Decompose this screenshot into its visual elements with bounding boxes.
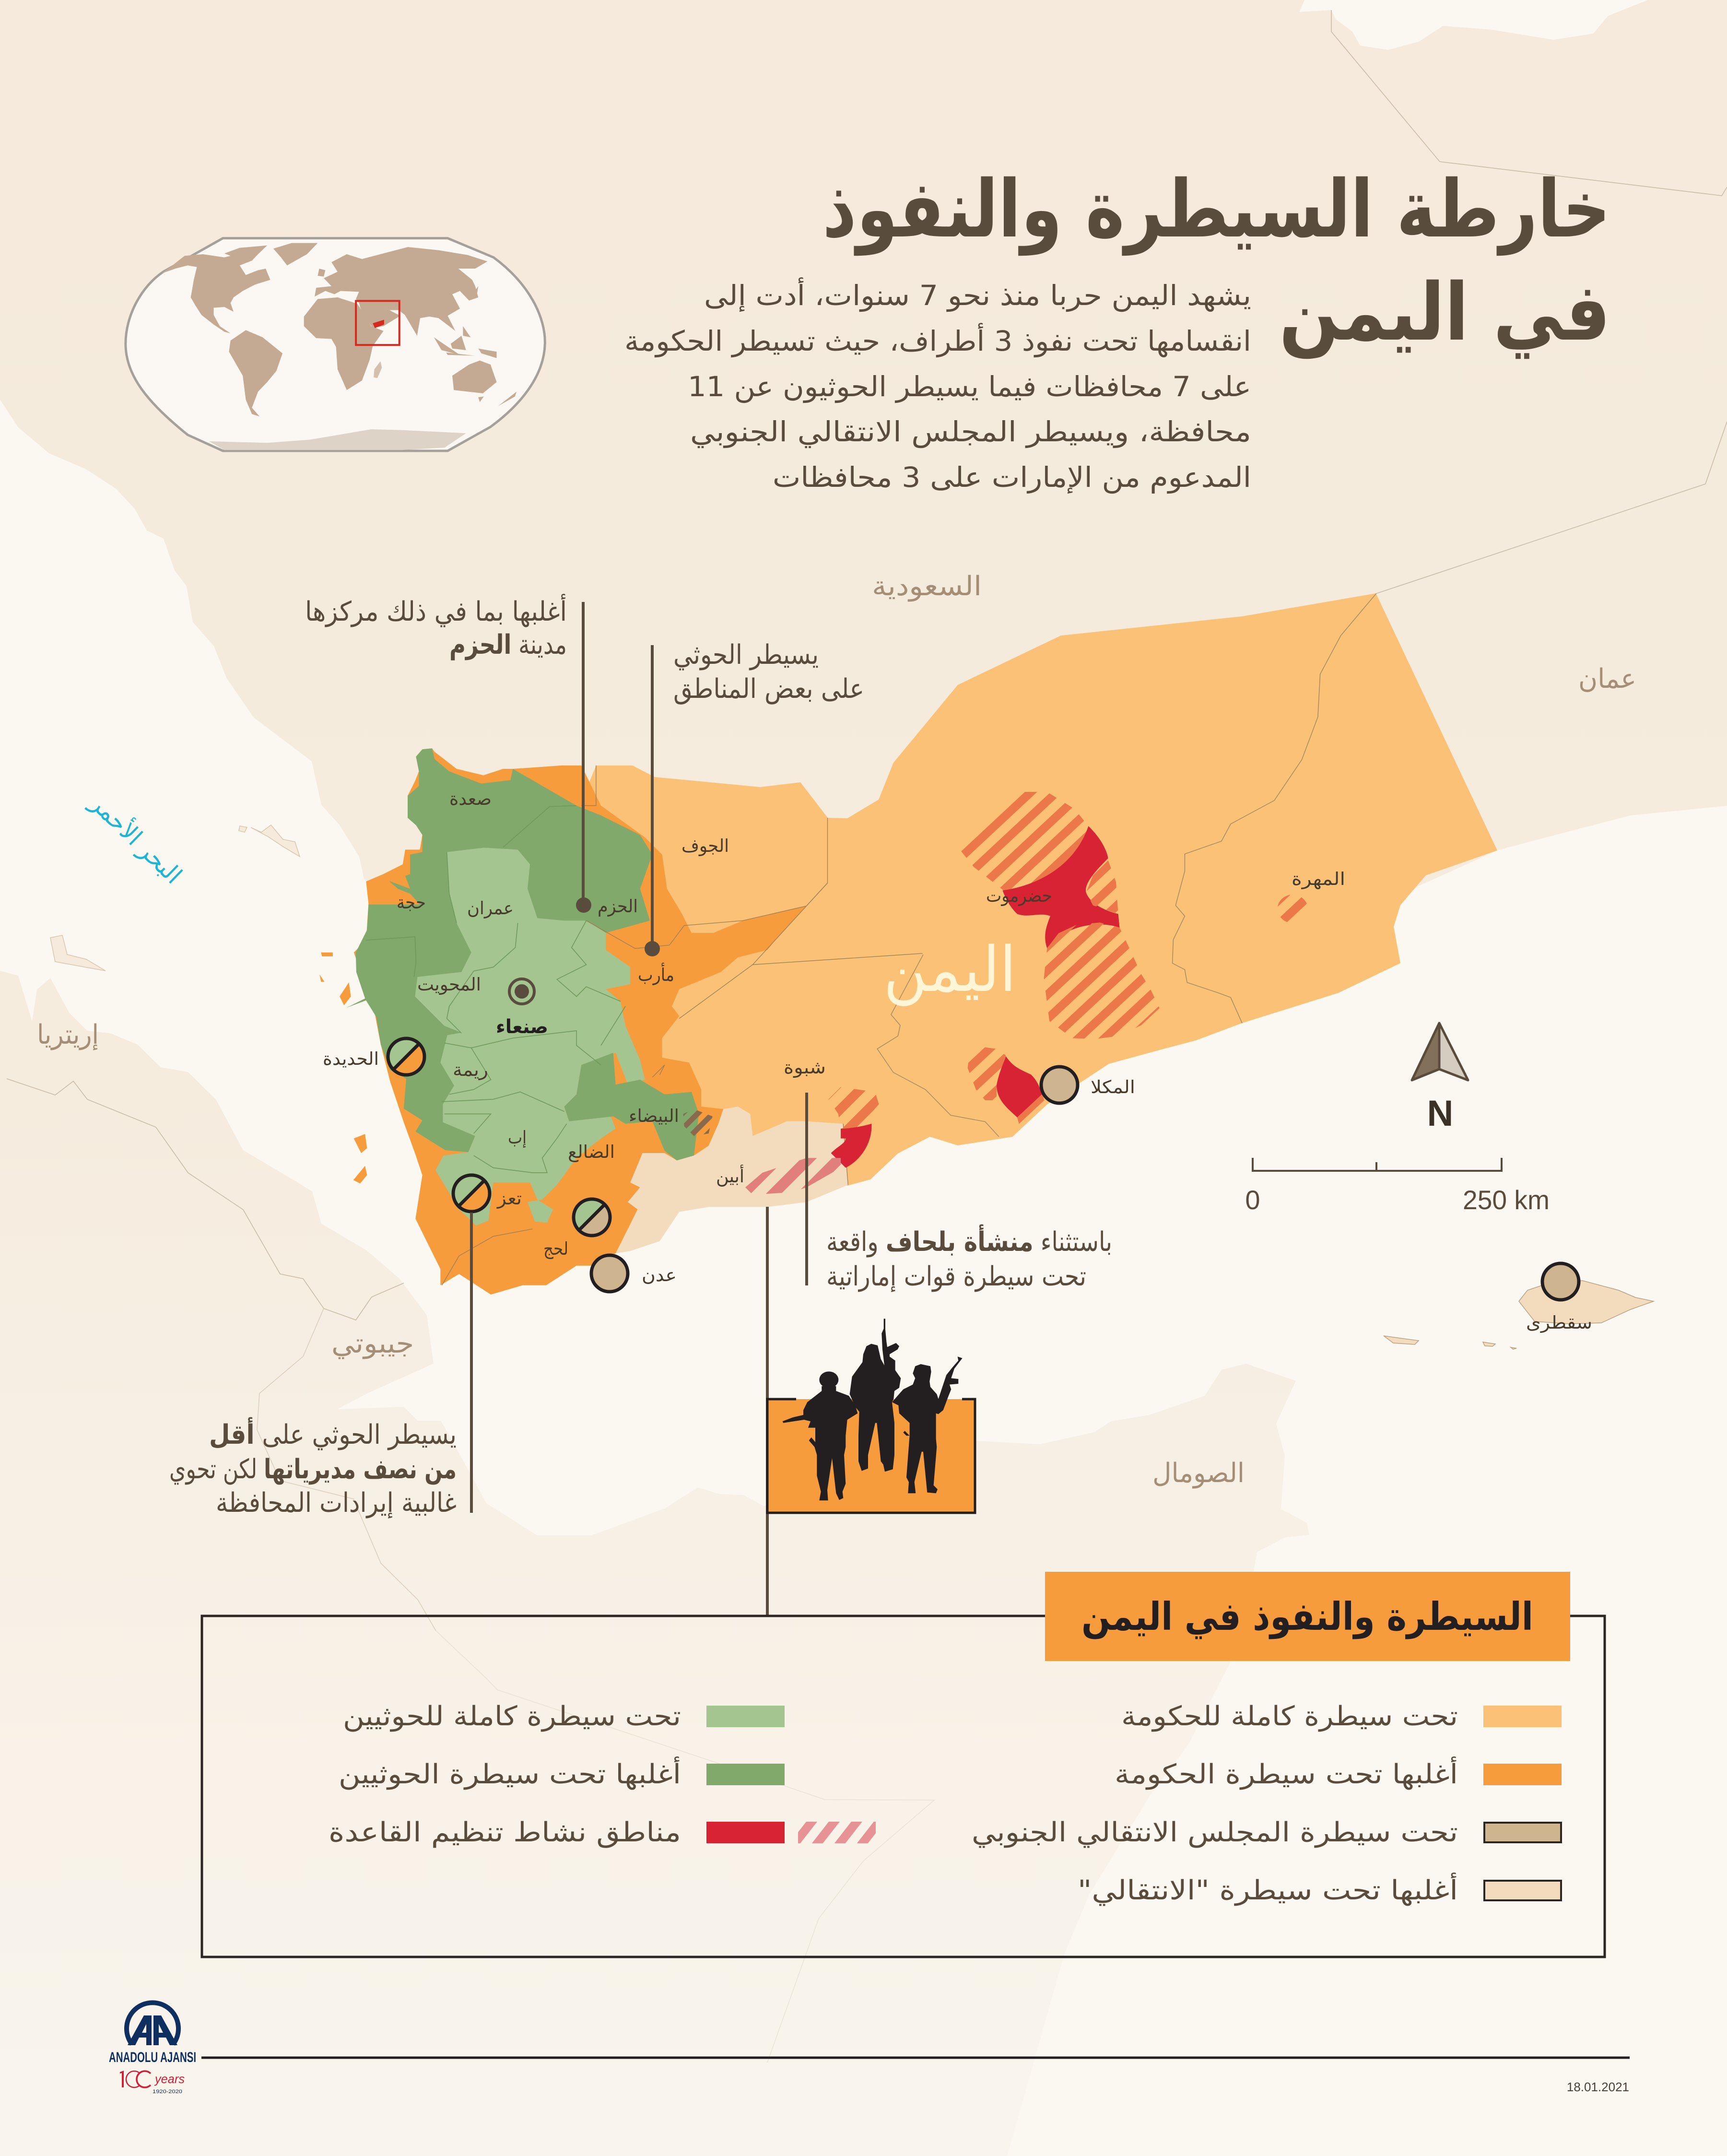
callout: Taiz: من نصف مديرياتها لكن تحوي: [169, 1454, 457, 1485]
soldiers panel: [767, 1319, 975, 1513]
intro paragraph: [624, 277, 1251, 494]
callout: Taiz: يسيطر الحوثي على أقل: [209, 1417, 457, 1450]
province labels: أبين: [716, 1165, 744, 1187]
province boundaries: [366, 806, 625, 1173]
region: mostly government: [354, 748, 807, 1295]
scale bar: [1245, 1158, 1550, 1215]
province labels: صعدة: [449, 789, 492, 809]
eastern province boundaries: [877, 594, 1376, 1137]
continents: [162, 243, 517, 416]
sea label: Red Sea: البحر الأحمر: [84, 788, 188, 889]
legend: mostly government: أغلبها تحت سيطرة الحكومة: [1115, 1756, 1458, 1790]
date: 18.01.2021: [1567, 2080, 1629, 2094]
province labels: المحويت: [417, 974, 481, 995]
callout: Marib: على بعض المناطق: [673, 673, 864, 705]
gulf sea patch: [1299, 0, 1648, 50]
globe frame: [126, 238, 545, 451]
callout: Taiz: [169, 1213, 471, 1519]
province labels: الحديدة: [323, 1049, 379, 1069]
red: Hadramawt: [1002, 826, 1119, 948]
map of Yemen: [319, 593, 1497, 1295]
scale bar: 250 km: [1463, 1185, 1550, 1215]
province labels: المكلا: [1091, 1077, 1135, 1097]
scale bar: 0: [1245, 1185, 1260, 1215]
legend: full government: تحت سيطرة كاملة للحكومة: [1121, 1701, 1458, 1732]
legend: mostly STC: أغلبها تحت سيطرة "الانتقالي": [1078, 1873, 1458, 1906]
hatch: Abyan AQAP: [745, 1158, 841, 1195]
province labels: شبوة: [784, 1057, 826, 1078]
red: Mukalla: [997, 1056, 1043, 1118]
province labels: المهرة: [1292, 869, 1345, 889]
province labels: سقطرى: [1526, 1312, 1592, 1333]
intro paragraph: انقسامها تحت نفوذ 3 أطراف، حيث تسيطر الحكومة: [624, 323, 1251, 358]
legend title: السيطرة والنفوذ في اليمن: [1081, 1594, 1533, 1639]
country label: Oman: عمان: [1578, 663, 1636, 695]
legend: mostly STC: [1078, 1873, 1561, 1906]
province labels: الجوف: [681, 836, 729, 856]
region: mostly STC (Abyan): [616, 1107, 848, 1253]
madagascar: [374, 361, 382, 378]
province labels: البيضاء: [629, 1106, 679, 1126]
legend: AQAP areas: مناطق نشاط تنظيم القاعدة: [329, 1817, 681, 1848]
map label: Yemen: اليمن: [883, 933, 1016, 1006]
hatch: Hadramawt north: [960, 792, 1088, 890]
callout: Taiz: غالبية إيرادات المحافظة: [216, 1487, 457, 1519]
country label: Somalia: الصومال: [1152, 1458, 1245, 1489]
red sea islands: [50, 825, 300, 971]
hatch: Hadramawt south: [1044, 922, 1160, 1039]
connector line to legend: [766, 1207, 769, 1616]
intro paragraph: المدعوم من الإمارات على 3 محافظات: [773, 461, 1251, 494]
title: [822, 163, 1610, 359]
legend: mostly government: [1115, 1756, 1562, 1790]
legend: mostly Houthi: أغلبها تحت سيطرة الحوثيين: [339, 1756, 681, 1790]
region: Al Bayda mostly Houthi: [564, 1053, 699, 1160]
callout: Marib: يسيطر الحوثي: [673, 639, 819, 671]
province labels: الضالع: [568, 1142, 615, 1162]
north arrow: [1412, 1023, 1468, 1134]
legend frame: [202, 1616, 1605, 1957]
marker: Aden: [591, 1255, 628, 1292]
province labels: عمران: [467, 898, 514, 919]
intro paragraph: محافظة، ويسيطر المجلس الانتقالي الجنوبي: [690, 415, 1251, 448]
region: full government control: [576, 593, 1497, 1186]
title: في اليمن: [1279, 266, 1610, 359]
country label: Djibouti: جيبوتي: [331, 1328, 414, 1359]
yemen highlight: [373, 320, 384, 328]
marker: Mukalla: [1041, 1067, 1078, 1103]
legend title: [1045, 1572, 1570, 1661]
province labels: مأرب: [638, 963, 674, 985]
country label: Saudi Arabia: السعودية: [872, 571, 982, 602]
province labels: إب: [508, 1127, 527, 1148]
callout: Balhaf: [807, 1093, 1112, 1293]
north arrow: N: [1427, 1093, 1453, 1134]
province labels: لحج: [543, 1238, 568, 1259]
province labels: حضرموت: [986, 885, 1052, 906]
logo: Anadolu Agency: ANADOLU AJANSI: [109, 2050, 196, 2065]
legend: AQAP areas: [329, 1817, 876, 1848]
legend: mostly Houthi: [339, 1756, 785, 1790]
hatch: Bayda AQAP: [683, 1109, 713, 1136]
province labels: ريمة: [453, 1060, 488, 1080]
province labels: تعز: [496, 1188, 522, 1209]
marker: Lahj split: [574, 1199, 610, 1236]
region: full Houthi control: [415, 848, 645, 1225]
province labels: [323, 789, 1592, 1333]
callout: Balhaf: تحت سيطرة قوات إماراتية: [826, 1261, 1086, 1293]
red: Shabwa AQAP: [831, 1124, 871, 1168]
logo: Anadolu Agency: [109, 2003, 196, 2095]
province labels: عدن: [642, 1265, 677, 1285]
callout: Al Hazm: [305, 594, 591, 913]
antarctica: [209, 429, 466, 450]
country label: Eritrea: إريتريا: [37, 1019, 99, 1051]
logo: Anadolu Agency: years: [154, 2072, 185, 2086]
province labels: صنعاء: [496, 1016, 548, 1038]
logo: Anadolu Agency: 1920-2020: [153, 2089, 182, 2095]
callout: Balhaf: باستثناء منشأة بلحاف واقعة: [826, 1224, 1112, 1258]
province labels: حجة: [397, 892, 426, 913]
icon: soldiers silhouette: [783, 1319, 963, 1500]
world locator map: [126, 238, 545, 451]
hatch: Shabwa AQAP: [829, 1087, 879, 1131]
region: mostly Houthi: [346, 748, 652, 1152]
marker: Taiz split: [453, 1175, 490, 1212]
hatch: Mukalla: [968, 1047, 1006, 1100]
callout: Al Hazm: مدينة الحزم: [449, 629, 567, 660]
hatch: Hadramawt centre: [1086, 860, 1118, 914]
province labels: الحزم: [598, 896, 638, 917]
marker: Sanaa capital: [509, 979, 534, 1004]
coastal islands: [319, 869, 410, 1183]
callout: Al Hazm: أغلبها بما في ذلك مركزها: [305, 594, 567, 627]
hatch: Mahra: [1278, 895, 1308, 923]
marker: Socotra: [1542, 1263, 1579, 1300]
marker: Hudaydah split: [388, 1038, 424, 1075]
intro paragraph: يشهد اليمن حربا منذ نحو 7 سنوات، أدت إلى: [704, 277, 1251, 312]
Socotra island: [1384, 1281, 1654, 1349]
hatch: Mukalla coast: [1017, 1094, 1045, 1126]
orange box: [767, 1399, 975, 1513]
legend: full Houthi: تحت سيطرة كاملة للحوثيين: [343, 1701, 681, 1732]
legend: STC control: تحت سيطرة المجلس الانتقالي الجنوبي: [972, 1817, 1458, 1848]
footer line: [201, 2057, 1630, 2059]
locator rectangle: [356, 301, 399, 345]
callout: Marib: [645, 639, 864, 956]
intro paragraph: على 7 محافظات فيما يسيطر الحوثيون عن 11: [688, 370, 1251, 403]
